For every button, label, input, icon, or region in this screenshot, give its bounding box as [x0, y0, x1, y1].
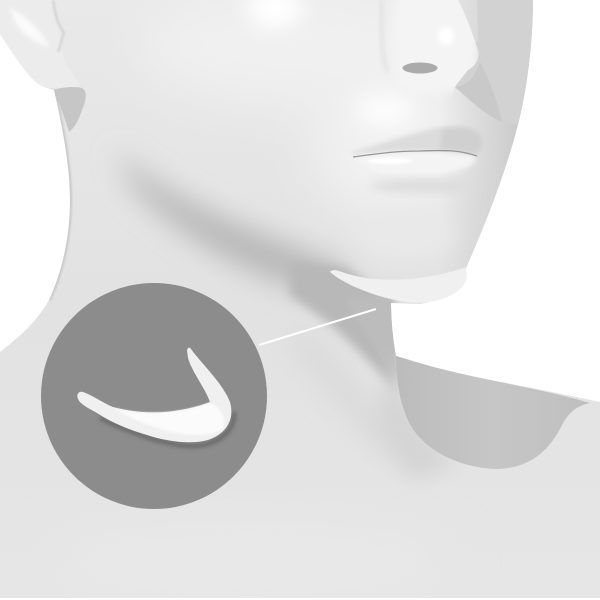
implant drop shadow — [100, 412, 234, 446]
mouth line — [353, 151, 477, 157]
connector line — [259, 309, 376, 345]
implant close-up — [77, 348, 231, 442]
magnified circle — [41, 283, 267, 509]
upper lip — [356, 126, 446, 154]
lower lip — [445, 152, 476, 170]
chest soft light — [50, 530, 450, 590]
nostril — [402, 62, 438, 74]
face light — [199, 44, 334, 72]
right cheek plane — [458, 0, 533, 260]
ear lobe shadow — [54, 87, 86, 132]
shoulder recess shadow — [396, 356, 590, 469]
ear — [0, 0, 80, 88]
cheek triangle — [455, 62, 502, 122]
nose — [399, 0, 478, 91]
lower neck soft shadow — [285, 330, 420, 460]
neck left rim shading — [49, 90, 70, 300]
under-chin neck shadow — [290, 262, 398, 395]
chin light — [355, 210, 455, 260]
jaw shadow band — [115, 150, 345, 300]
chin implant — [330, 268, 467, 303]
